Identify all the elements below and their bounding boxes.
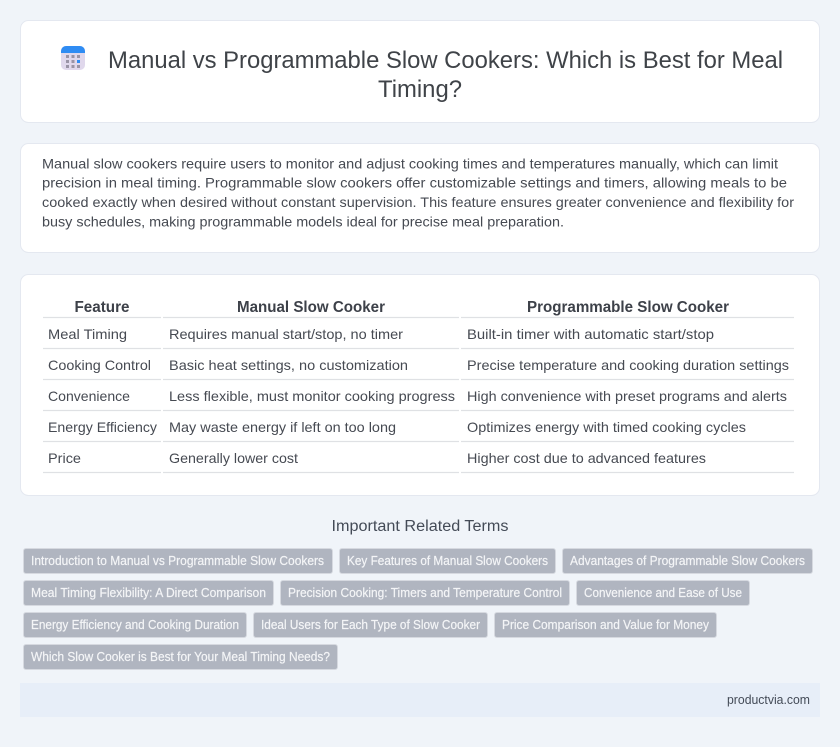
summary text: precision in meal timing. Programmable slow cookers offer customizable settings and timers, allowing meals to be xyxy=(42,175,787,191)
row: convenience: High convenience with preset programs and alerts xyxy=(467,388,787,404)
panel: title header xyxy=(20,20,820,122)
table header: Feature xyxy=(74,299,130,316)
row: meal timing: Built-in timer with automatic start/stop xyxy=(467,326,714,342)
summary text: busy schedules, making programmable models ideal for precise meal preparation. xyxy=(42,214,564,230)
row: energy efficiency: Energy Efficiency xyxy=(48,419,157,435)
heading: important related terms: Important Related Terms xyxy=(332,518,509,535)
tag row 3: Price Comparison and Value for Money xyxy=(502,618,710,632)
row: energy efficiency: May waste energy if left on too long xyxy=(169,419,396,435)
row: price: Price xyxy=(48,450,81,466)
tag row 1: Advantages of Programmable Slow Cookers xyxy=(570,554,805,568)
table header: Programmable Slow Cooker xyxy=(527,299,729,316)
footer source: productvia.com xyxy=(727,693,810,707)
row: price: Generally lower cost xyxy=(169,450,298,466)
title: Manual vs Programmable Slow Cookers: Which is Best for Meal xyxy=(108,47,783,74)
row: meal timing: Requires manual start/stop, no timer xyxy=(169,326,403,342)
table header: Manual Slow Cooker xyxy=(237,299,385,316)
tag row 4: Which Slow Cooker is Best for Your Meal Timing Needs? xyxy=(31,650,330,664)
footer bar xyxy=(20,683,820,717)
row: cooking control: Basic heat settings, no customization xyxy=(169,357,408,373)
panel: summary paragraph xyxy=(20,144,820,252)
row: convenience xyxy=(48,388,787,404)
row: energy efficiency xyxy=(48,419,746,435)
tag row 4 xyxy=(24,644,338,670)
row: price: Higher cost due to advanced features xyxy=(467,450,706,466)
tag row 2: Meal Timing Flexibility: A Direct Comparison xyxy=(31,586,266,600)
tag row 3: Energy Efficiency and Cooking Duration xyxy=(31,618,239,632)
tag row 1: Key Features of Manual Slow Cookers xyxy=(347,554,548,568)
icon: calendar xyxy=(61,46,85,70)
row: convenience: Less flexible, must monitor cooking progress xyxy=(169,388,455,404)
title: Timing? xyxy=(378,76,462,103)
row: meal timing: Meal Timing xyxy=(48,326,127,342)
related term tags xyxy=(24,548,812,670)
tag row 2: Convenience and Ease of Use xyxy=(584,586,742,600)
row: cooking control xyxy=(48,357,789,373)
tag row 2 xyxy=(24,580,750,606)
row: price xyxy=(48,450,706,466)
tag row 2: Precision Cooking: Timers and Temperature Control xyxy=(288,586,562,600)
tag row 3: Ideal Users for Each Type of Slow Cooker xyxy=(261,618,480,632)
row: meal timing xyxy=(48,326,714,342)
row: energy efficiency: Optimizes energy with timed cooking cycles xyxy=(467,419,746,435)
summary text: Manual slow cookers require users to monitor and adjust cooking times and temperatures manually, which can limit xyxy=(42,155,778,171)
tag row 1: Introduction to Manual vs Programmable Slow Cookers xyxy=(31,554,324,568)
row: cooking control: Precise temperature and cooking duration settings xyxy=(467,357,789,373)
row: cooking control: Cooking Control xyxy=(48,357,151,373)
tag row 1 xyxy=(24,548,812,574)
panel: comparison table xyxy=(20,274,820,496)
row: convenience: Convenience xyxy=(48,388,130,404)
table header xyxy=(74,299,729,316)
summary text: cooked exactly when desired without constant supervision. This feature ensures greater convenience and flexibility for xyxy=(42,194,794,210)
tag row 3 xyxy=(24,612,716,638)
